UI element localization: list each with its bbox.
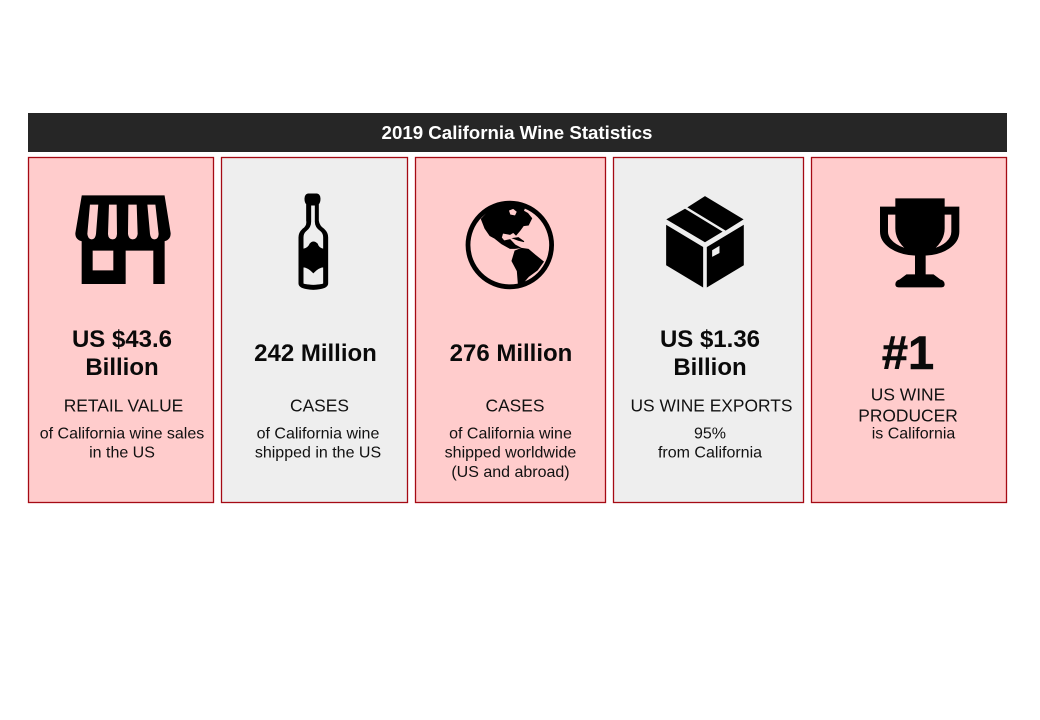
label: retail value: RETAIL VALUE — [64, 396, 183, 416]
stat: US $43.6 Billion: US $43.6 — [72, 326, 172, 353]
label: US wine producer: PRODUCER — [858, 406, 958, 426]
description: wine sales: of California wine sales — [40, 426, 204, 442]
description: shipped in the US: of California wine — [257, 426, 379, 442]
description: wine sales — [40, 426, 204, 462]
panel: US cases — [222, 158, 408, 502]
panel: retail value — [28, 158, 214, 502]
description: shipped in the US: shipped in the US — [255, 444, 381, 462]
description: 95% from California — [658, 426, 762, 462]
panel: number one producer — [812, 158, 1006, 502]
description: wine sales: in the US — [89, 444, 155, 462]
icon: globe — [468, 203, 552, 287]
description: shipped worldwide — [445, 426, 576, 481]
icon: wine bottle — [299, 194, 328, 289]
panel: worldwide cases — [416, 158, 606, 502]
label: cases: CASES — [290, 396, 349, 416]
description: shipped in the US — [255, 426, 381, 462]
description: shipped worldwide: of California wine — [449, 426, 572, 442]
description: is California: is California — [872, 426, 955, 442]
icon: shipping box — [667, 197, 743, 287]
title bar: 2019 California Wine Statistics — [382, 122, 652, 143]
title bar — [28, 113, 1007, 152]
stat: US $1.36 Billion: US $1.36 — [660, 326, 760, 353]
label: US wine producer: US WINE — [871, 384, 945, 404]
label: US wine producer — [858, 384, 958, 426]
stat: 242 Million: 242 Million — [254, 340, 377, 367]
description: 95% from California: 95% — [694, 426, 726, 442]
stat: US $1.36 Billion: Billion — [673, 354, 747, 381]
stat: US $43.6 Billion — [72, 326, 172, 381]
label: US wine exports: US WINE EXPORTS — [630, 396, 793, 416]
stat: US $43.6 Billion: Billion — [85, 354, 159, 381]
description: shipped worldwide: shipped worldwide — [445, 444, 576, 462]
description: 95% from California: from California — [658, 444, 762, 462]
panel: US wine exports — [614, 158, 804, 502]
stat: number one: #1 — [882, 326, 934, 379]
label: cases: CASES — [486, 396, 544, 416]
icon: storefront — [76, 196, 170, 283]
stat: 276 Million: 276 Million — [450, 340, 572, 367]
stat: US $1.36 Billion — [660, 326, 760, 381]
icon: trophy — [881, 199, 959, 287]
description: shipped worldwide: (US and abroad) — [451, 464, 570, 481]
